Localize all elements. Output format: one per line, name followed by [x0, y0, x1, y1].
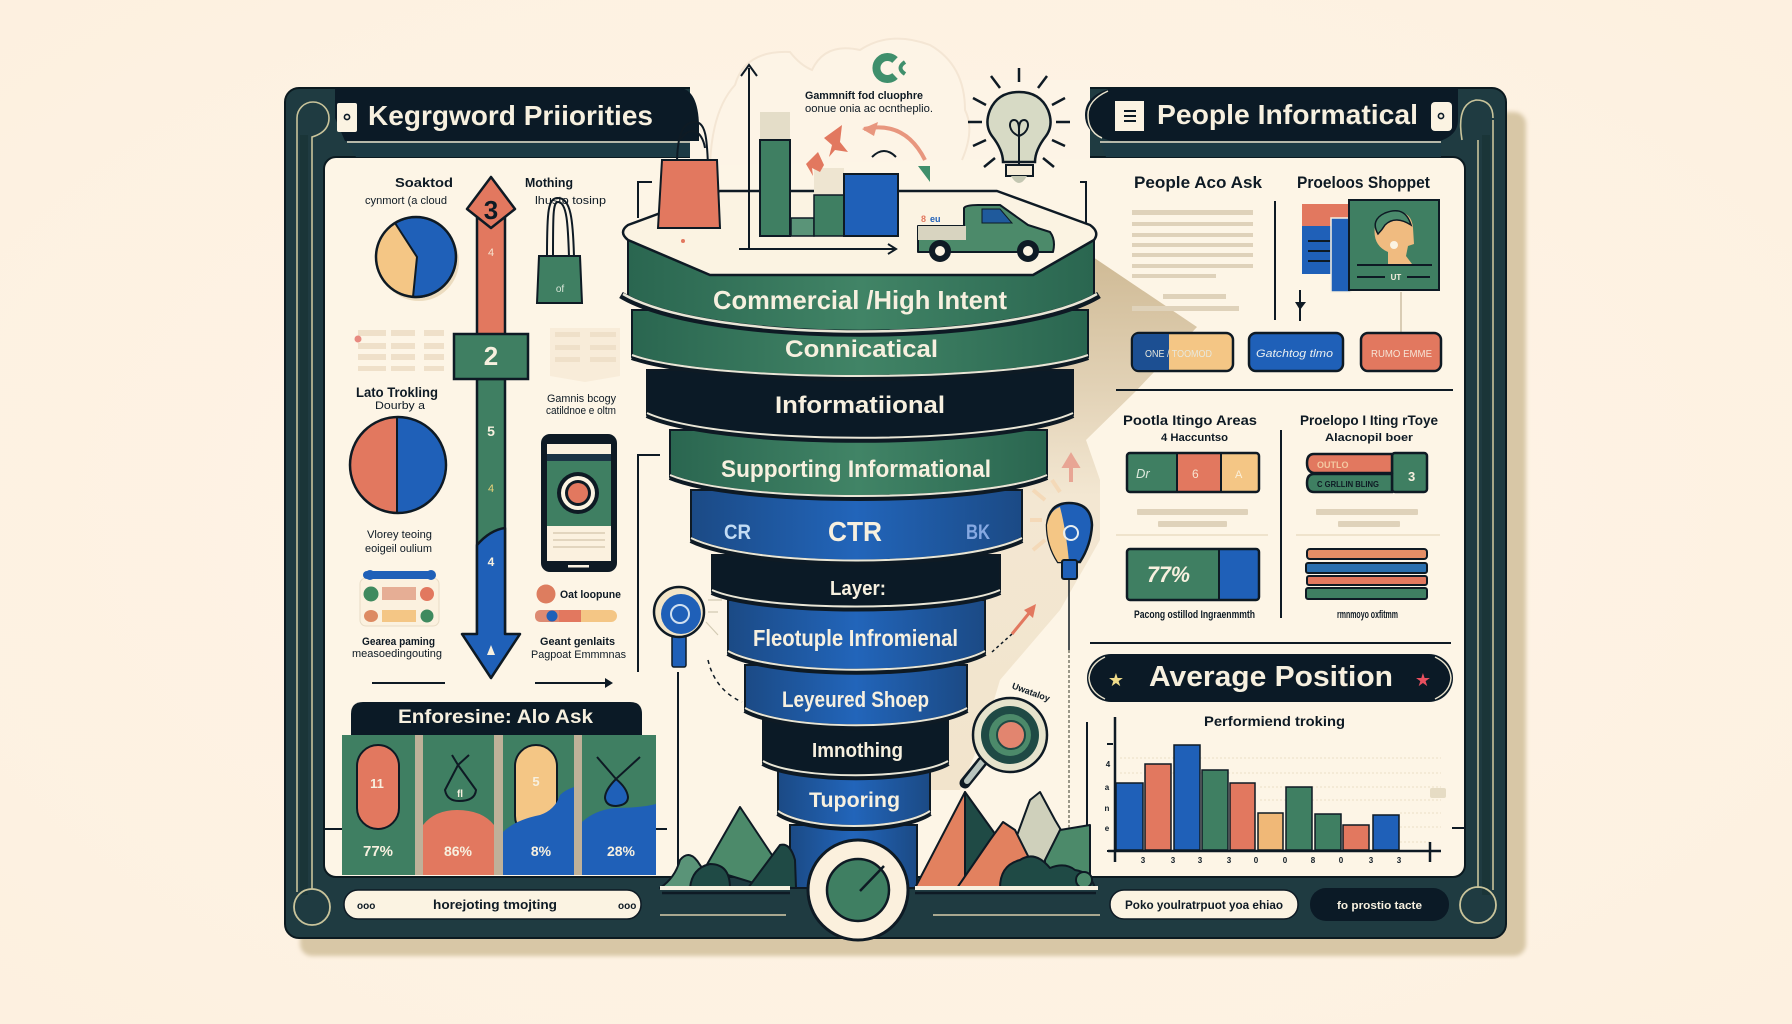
chart note	[805, 90, 933, 115]
funnel layer: ctr	[691, 490, 1022, 562]
divider above average position	[1090, 642, 1451, 644]
short tick	[1452, 827, 1465, 829]
card two	[423, 735, 494, 875]
pie chart one with labels: cynmort (a cloud	[365, 195, 447, 207]
funnel layer: commercial high intent: Commercial /High Intent	[713, 285, 1007, 315]
card four	[582, 735, 656, 875]
red arrows	[806, 122, 930, 182]
funnel layer: imnothing	[763, 720, 948, 777]
metrics block right	[1296, 412, 1440, 621]
open top gap between headers	[690, 80, 1090, 159]
left blue pin	[654, 587, 722, 667]
chart note: oonue onia ac ocntheplio.	[805, 103, 933, 115]
button two: Gatchtog tlmo	[1256, 348, 1333, 360]
pie chart two with labels: Vlorey teoing	[367, 529, 432, 541]
card four: 28%	[607, 843, 636, 859]
metrics block left: 4 Haccuntso	[1161, 432, 1228, 444]
title: keyword priorities: Kegrgword Priiorities	[368, 100, 653, 131]
top chart cloud	[710, 39, 969, 165]
card heading	[351, 702, 642, 735]
icon: green shopping bag: of	[556, 284, 564, 295]
pie chart two with labels	[349, 384, 446, 555]
pie chart two with labels: Dourby a	[375, 400, 426, 412]
priority arrow: 2	[484, 341, 498, 371]
footer pill left: horejoting tmojting	[433, 897, 557, 912]
footer pill right white: Poko youlratrpuot yoa ehiao	[1125, 898, 1283, 912]
footer pill left	[344, 890, 641, 919]
button three: RUMO EMME	[1371, 349, 1432, 360]
pie chart one with labels: Soaktod	[395, 175, 453, 190]
mountains right	[915, 792, 1095, 888]
funnel layer: supporting informational: Supporting Informational	[721, 456, 991, 483]
funnel layer: ctr: CR	[724, 521, 751, 544]
legend card: Gearea paming	[362, 636, 435, 648]
footer pill left: ooo	[618, 901, 636, 912]
base shelf	[660, 886, 1098, 890]
title: people informatical: People Informatical	[1157, 99, 1418, 130]
icon: phone	[541, 434, 617, 572]
metrics block left: Dr	[1136, 466, 1150, 481]
left header	[335, 88, 699, 157]
card two: fl	[457, 789, 463, 800]
footer pill right white	[1110, 890, 1298, 919]
metrics block right: Alacnopil boer	[1325, 432, 1414, 444]
magnifier	[965, 681, 1051, 783]
icon: green c	[876, 57, 905, 79]
performance bar chart: e	[1105, 824, 1110, 833]
main panel	[324, 157, 1465, 877]
phone legend	[531, 584, 626, 661]
performance bar chart: 0	[1339, 856, 1344, 865]
right column: people also ask	[1132, 173, 1263, 311]
faded text block right	[550, 328, 620, 382]
funnel layer: leyeured shoep: Leyeured Shoep	[782, 687, 929, 712]
icon: light bulb	[968, 68, 1070, 183]
funnel layer: fleotuple informienal	[728, 600, 985, 672]
label: mothing: lhusto tosinp	[535, 195, 606, 207]
performance bar chart: Performiend troking	[1204, 713, 1345, 729]
performance bar chart: 4	[1106, 760, 1111, 769]
legend card	[352, 570, 442, 660]
card three: 5	[532, 774, 540, 789]
funnel layer: tuporing	[778, 770, 930, 828]
card three	[503, 735, 574, 875]
divider and down arrow	[1275, 201, 1300, 321]
performance bar chart: 0	[1283, 856, 1288, 865]
label: gamnis: catildnoe e oltm	[546, 405, 616, 417]
button one	[1132, 333, 1233, 371]
icon: menu box	[1115, 101, 1144, 131]
metrics block left	[1116, 412, 1268, 621]
footer pill left: ooo	[357, 901, 375, 912]
metrics block right: OUTLO	[1317, 460, 1348, 470]
faded text block left	[354, 330, 444, 371]
performance bar chart: 8	[1311, 856, 1316, 865]
performance bar chart: 3	[1369, 856, 1374, 865]
funnel layer: ctr: CTR	[828, 516, 882, 547]
phone legend: Oat loopune	[560, 589, 621, 601]
footer pill right dark: fo prostio tacte	[1337, 900, 1422, 912]
column divider	[1116, 389, 1453, 391]
funnel	[621, 191, 1099, 888]
right brackets	[1080, 182, 1086, 230]
right column: product cards: Proeloos Shoppet	[1297, 173, 1430, 192]
performance bar chart: n	[1105, 804, 1110, 813]
right column: product cards	[1297, 173, 1439, 292]
average position banner: ★	[1108, 670, 1124, 690]
funnel layer: connicatical	[632, 310, 1088, 378]
label: mothing	[525, 175, 606, 207]
metrics block left: A	[1235, 469, 1243, 481]
average position banner: ★	[1415, 670, 1431, 690]
chart note: Gammnift fod cluophre	[805, 90, 923, 102]
funnel layer: tuporing: Tuporing	[809, 789, 900, 812]
funnel layer: supporting informational	[670, 430, 1047, 498]
top bar chart	[739, 57, 933, 254]
performance bar chart: 3	[1198, 856, 1203, 865]
button two	[1249, 333, 1343, 371]
red dashed arrow	[992, 604, 1036, 652]
performance bar chart: 0	[1254, 856, 1259, 865]
connector line	[1400, 292, 1402, 333]
left brackets	[638, 182, 660, 672]
priority arrow: 4	[488, 555, 495, 569]
priority arrow: 4	[488, 247, 494, 259]
label: gamnis: Gamnis bcogy	[547, 393, 616, 405]
phone legend: Pagpoat Emmmnas	[531, 649, 626, 661]
guide lines around funnel	[678, 672, 1087, 870]
performance bar chart	[1105, 713, 1446, 865]
label: gamnis	[546, 393, 616, 417]
card heading: Enforesine: Alo Ask	[398, 707, 593, 728]
right column: people also ask: People Aco Ask	[1134, 173, 1263, 192]
funnel layer: layer: Layer:	[830, 578, 886, 600]
board frame	[285, 88, 1526, 956]
funnel layer: connicatical: Connicatical	[785, 336, 938, 363]
metrics block right: Proelopo I Iting rToye	[1300, 412, 1438, 428]
funnel layer: leyeured shoep	[745, 665, 967, 727]
funnel layer: ctr: BK	[966, 521, 990, 544]
pie chart two with labels: eoigeil oulium	[365, 543, 432, 555]
vertical divider	[1280, 430, 1282, 618]
pie chart two with labels: Lato Trokling	[356, 384, 438, 400]
metrics block right: rmnmoyo oxfitmm	[1337, 609, 1398, 621]
funnel stem	[790, 825, 917, 888]
performance bar chart: 3	[1227, 856, 1232, 865]
metrics block left: Pootla Itingo Areas	[1123, 412, 1257, 428]
performance bar chart: 3	[1171, 856, 1176, 865]
pie chart one with labels	[365, 175, 459, 301]
card one: 11	[370, 776, 384, 791]
icon: green shopping bag	[537, 198, 582, 303]
funnel layer: imnothing: Imnothing	[812, 740, 903, 762]
icon: red shopping bag	[658, 122, 720, 243]
button row	[1132, 333, 1441, 371]
metrics block right: 3	[1408, 469, 1415, 484]
button three	[1361, 333, 1441, 371]
card one	[342, 735, 415, 875]
funnel layer: commercial high intent	[621, 230, 1099, 334]
priority arrow: 3	[484, 195, 498, 225]
card one: 77%	[363, 843, 393, 860]
icon: truck	[918, 205, 1054, 262]
right column: product cards: UT	[1391, 273, 1401, 282]
button one: ONE / TOOMOD	[1145, 349, 1212, 360]
funnel layer: informatiional	[647, 370, 1073, 440]
magnifier: Uwataloy	[1011, 681, 1051, 704]
right header	[1085, 88, 1458, 157]
footer pill right dark	[1310, 888, 1449, 921]
separators with arrow	[372, 682, 606, 684]
priority arrow	[454, 177, 528, 678]
performance bar chart: a	[1105, 783, 1110, 792]
performance bar chart: 3	[1397, 856, 1402, 865]
funnel cast shadow	[900, 255, 1197, 790]
funnel layer: informatiional: Informatiional	[775, 392, 945, 419]
average position banner	[1087, 654, 1453, 702]
right blue bulb pin	[1030, 456, 1092, 650]
metrics block right: C GRLLIN BLING	[1317, 480, 1379, 489]
label: mothing: Mothing	[525, 175, 573, 190]
metrics block left: 6	[1192, 467, 1199, 481]
mountains left	[660, 807, 796, 888]
performance bar chart: 3	[1141, 856, 1146, 865]
funnel layer: fleotuple informienal: Fleotuple Infromienal	[753, 625, 958, 651]
bottom-left card group	[325, 702, 667, 875]
card two: 86%	[444, 843, 473, 859]
legend card: measoedingouting	[352, 648, 442, 660]
gauge circle	[808, 840, 908, 940]
card three: 8%	[531, 843, 552, 859]
icon: truck: 8	[921, 214, 926, 224]
metrics block left: 77%	[1147, 562, 1190, 587]
phone legend: Geant genlaits	[540, 636, 615, 648]
funnel top platter	[623, 191, 1096, 275]
priority arrow: 4	[488, 483, 494, 495]
metrics block left: Pacong ostillod Ingraenmmth	[1134, 609, 1255, 621]
average position banner: Average Position	[1149, 661, 1393, 693]
priority arrow: 5	[487, 423, 495, 439]
funnel layer: layer	[712, 555, 1000, 608]
icon: truck: eu	[930, 214, 941, 224]
